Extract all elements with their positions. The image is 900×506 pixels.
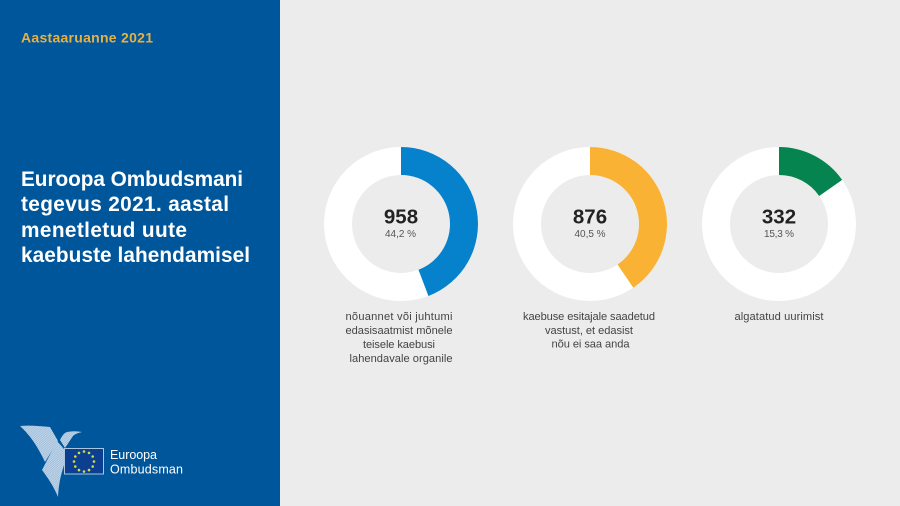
panel: 876 complainants answered xyxy=(523,147,667,350)
report label: Aastaaruanne 2021 xyxy=(21,30,153,46)
logo text xyxy=(110,448,183,476)
title: menetletud uute xyxy=(21,219,187,242)
donut chart: 15,3 % xyxy=(716,147,842,287)
caption: vastust, et edasist xyxy=(545,325,633,337)
logo text: Ombudsman xyxy=(110,462,183,476)
donut chart: 40,5 % xyxy=(527,147,667,288)
title xyxy=(21,168,250,267)
panel: left sidebar xyxy=(0,0,280,506)
panel: 332 inquiries opened xyxy=(716,147,842,323)
caption: algatatud uurimist xyxy=(734,311,824,323)
title: tegevus 2021. aastal xyxy=(21,193,229,216)
title: kaebuste lahendamisel xyxy=(21,244,250,267)
caption: nõu ei saa anda xyxy=(552,338,630,350)
panel: 958 complaints advised or transferred xyxy=(338,147,478,365)
title: Euroopa Ombudsmani xyxy=(21,168,243,191)
value: 332: 332 xyxy=(762,206,796,228)
logo: European Ombudsman xyxy=(20,426,183,497)
caption: teisele kaebusi xyxy=(363,339,435,351)
logo text: Euroopa xyxy=(110,448,157,462)
caption xyxy=(346,311,452,365)
percent: 40,5 %: 40,5 % xyxy=(574,229,606,240)
caption xyxy=(523,311,655,350)
value: 876: 876 xyxy=(573,206,607,228)
donut chart: 44,2 % xyxy=(338,147,478,296)
icon: EU flag xyxy=(64,448,104,474)
icon: stylised bird xyxy=(20,426,82,497)
caption: kaebuse esitajale saadetud xyxy=(523,311,655,323)
caption: nõuannet või juhtumi xyxy=(346,311,452,323)
caption: edasisaatmist mõnele xyxy=(346,325,452,337)
value: 958: 958 xyxy=(384,206,418,228)
caption: lahendavale organile xyxy=(350,353,452,365)
percent: 15,3 %: 15,3 % xyxy=(764,229,794,240)
percent: 44,2 %: 44,2 % xyxy=(385,229,416,240)
